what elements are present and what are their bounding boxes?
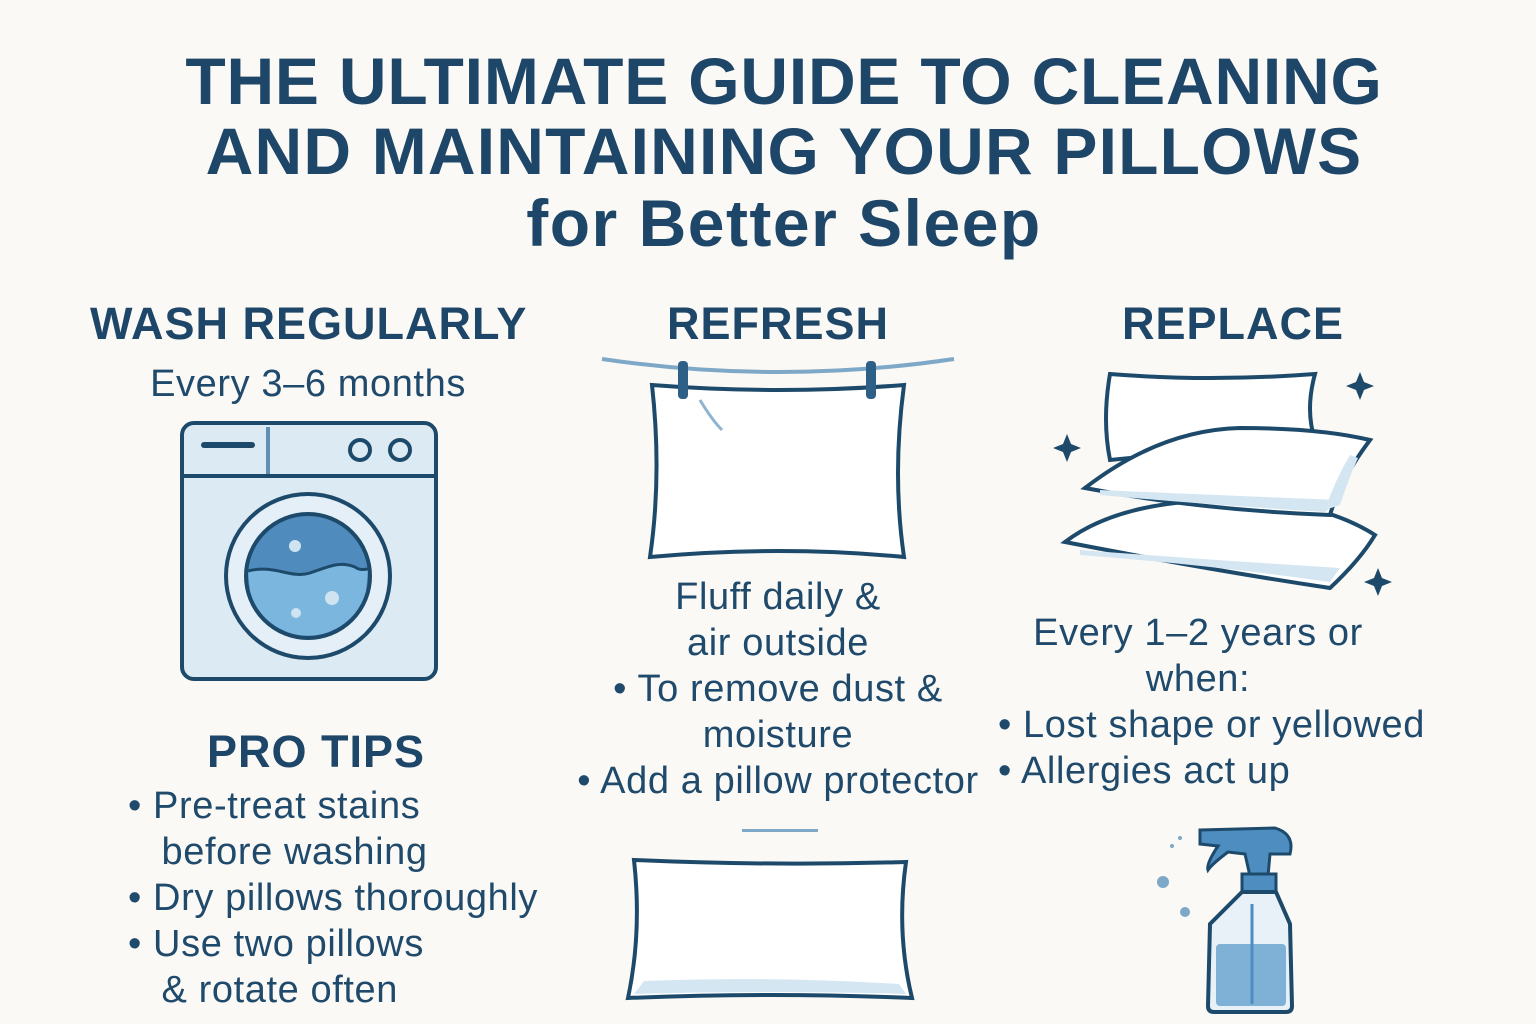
- text: refresh tips: • To remove dust &: [613, 668, 943, 710]
- text: refresh tips: air outside: [687, 622, 869, 664]
- list: pro tips: • Use two pillows: [128, 923, 424, 965]
- heading: refresh: REFRESH: [667, 298, 889, 349]
- icon: washing machine: [180, 421, 438, 681]
- text: replace tips: • Lost shape or yellowed: [998, 704, 1425, 746]
- text: refresh tips: Fluff daily &: [675, 576, 881, 618]
- title: THE ULTIMATE GUIDE TO CLEANING: [185, 44, 1383, 118]
- list: pro tips: & rotate often: [161, 969, 398, 1011]
- text: refresh tips: [577, 576, 979, 802]
- title: [185, 44, 1383, 260]
- list: pro tips: • Pre-treat stains: [128, 785, 420, 827]
- heading: wash regularly: WASH REGULARLY: [90, 298, 527, 349]
- text: refresh tips: moisture: [703, 714, 853, 756]
- list: pro tips: before washing: [161, 831, 428, 873]
- text: refresh tips: • Add a pillow protector: [577, 760, 979, 802]
- heading: replace: REPLACE: [1122, 298, 1344, 349]
- text: every 3-6 months: Every 3–6 months: [150, 363, 466, 405]
- text: replace tips: [998, 612, 1425, 792]
- heading: pro tips: PRO TIPS: [207, 726, 425, 777]
- text: replace tips: • Allergies act up: [998, 750, 1290, 792]
- divider: [742, 829, 818, 832]
- icon: flat pillow: [626, 858, 914, 1000]
- icon: pillow on clothesline: [602, 357, 954, 560]
- icon: spray bottle: [1157, 826, 1294, 1014]
- icon: stacked pillows with sparkles: [1053, 372, 1392, 596]
- text: replace tips: when:: [1146, 658, 1250, 700]
- list: pro tips: [128, 785, 538, 1011]
- list: pro tips: • Dry pillows thoroughly: [128, 877, 538, 919]
- title: for Better Sleep: [526, 186, 1042, 260]
- text: replace tips: Every 1–2 years or: [1033, 612, 1363, 654]
- title: AND MAINTAINING YOUR PILLOWS: [206, 114, 1362, 188]
